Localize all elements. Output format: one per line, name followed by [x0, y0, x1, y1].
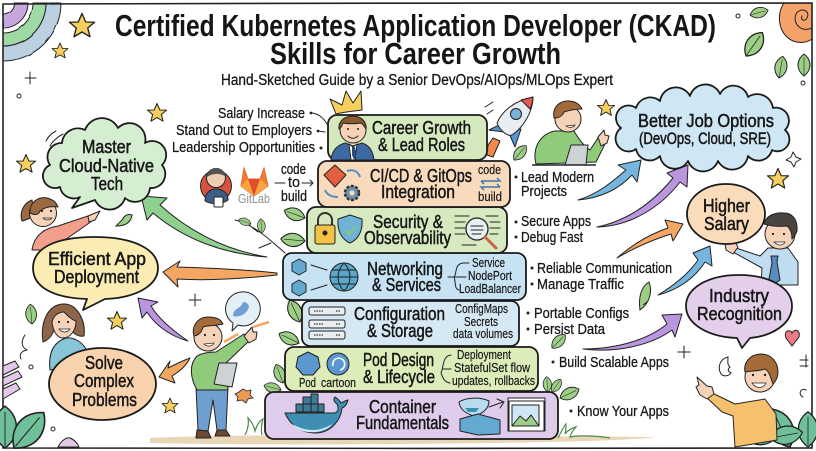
bubble: Master Cloud-Native Tech: Tech [91, 173, 123, 194]
arrow: to Better Job Options purple [597, 165, 688, 227]
layer: Pod Design & Lifecycle: Pod Design [363, 349, 434, 370]
bubble: Higher Salary: Salary [704, 213, 750, 234]
icon: speech bubble with cloud [226, 292, 260, 331]
callout: Secure Apps, Debug Fast: Debug Fast [521, 229, 584, 246]
callout: Reliable Communication, Manage Traffic: Manage Traffic [537, 276, 624, 293]
ground strip [150, 435, 655, 444]
icon: magnifier over logs [455, 216, 500, 248]
layer: Configuration & Storage: ConfigMaps [455, 302, 508, 316]
layer: Pod Design & Lifecycle: & Lifecycle [363, 366, 435, 387]
callout: Lead Modern Projects: Projects [521, 183, 567, 200]
callouts: career growth benefits: Leadership Opportunities [172, 139, 315, 156]
layer: Pod Design & Lifecycle: StatefulSet flow [454, 361, 531, 375]
icon: git diamond and cycle gear [324, 165, 360, 200]
bubble: Better Job Options: Better Job Options [638, 110, 774, 131]
callout: Reliable Communication, Manage Traffic [530, 260, 672, 293]
layer: CI/CD & GitOps Integration: Integration [381, 181, 455, 202]
bubble: Better Job Options [616, 84, 789, 171]
icon: padlock [315, 213, 335, 244]
decoration: top-left rainbow [3, 3, 61, 61]
callout: Portable Configs, Persist Data [526, 305, 629, 338]
arrow: to Industry Recognition [583, 314, 682, 350]
bubble: Industry Recognition: Industry [709, 285, 770, 306]
decoration: bottom-left foliage [0, 361, 79, 451]
icon: rocket [485, 97, 533, 157]
bubble: Efficient App Deployment: Efficient App [48, 248, 146, 269]
layer: Career Growth & Lead Roles [328, 91, 487, 160]
icon: double arrow [481, 178, 500, 190]
bubble: Industry Recognition [686, 275, 792, 348]
layer: Career Growth & Lead Roles: Career Growth [372, 117, 471, 138]
layer: Networking & Services: NodePort [468, 269, 512, 283]
layer: Container Fundamentals: Fundamentals [356, 412, 449, 433]
title: Skills for Career Growth [270, 36, 561, 71]
callout: Reliable Communication, Manage Traffic: Reliable Communication [537, 260, 672, 277]
flow: code to build [275, 161, 313, 205]
callout: Lead Modern Projects [514, 169, 594, 200]
icon: jenkins [200, 168, 232, 207]
layer: CI/CD & GitOps Integration [318, 161, 510, 207]
bubble: Better Job Options: (DevOps, Cloud, SRE) [639, 130, 771, 148]
icon: server stack [309, 307, 345, 339]
arrow: to Solve Complex Problems [159, 358, 190, 383]
callout: Secure Apps, Debug Fast: Secure Apps [521, 213, 591, 230]
layer: Security & Observability [307, 207, 507, 253]
callout: Know Your Apps: Know Your Apps [577, 403, 669, 420]
bubble: Higher Salary [687, 184, 765, 244]
flow: code to build: build [281, 188, 307, 205]
callout: Build Scalable Apps: Build Scalable Apps [559, 354, 669, 371]
layer: Networking & Services [283, 253, 526, 300]
person: crowned developer [330, 91, 374, 160]
layer: Configuration & Storage: Configuration [354, 303, 445, 324]
person: man pointing at Higher Salary [724, 213, 798, 285]
icon: network cubes [292, 259, 327, 296]
callouts: career growth benefits [172, 105, 327, 156]
callout: Portable Configs, Persist Data: Persist Data [534, 321, 606, 338]
flow: code to build: code [281, 161, 306, 178]
layer: Security & Observability: Security & [373, 211, 444, 232]
person: developer with laptop [532, 101, 609, 165]
callout: Lead Modern Projects: Lead Modern [521, 169, 594, 186]
callouts: career growth benefits: Salary Increase [218, 105, 305, 122]
icon: gitlab fox [241, 168, 268, 196]
bubble: Efficient App Deployment [33, 237, 158, 310]
arrow: to Master Cloud-Native Tech [141, 196, 267, 257]
callouts: career growth benefits: Stand Out to Employers [176, 122, 312, 139]
layer: Configuration & Storage [302, 301, 519, 346]
title [115, 8, 716, 71]
icon: rotating pod circle [327, 353, 349, 375]
layer: Pod Design & Lifecycle [285, 347, 538, 391]
layer: Pod Design & Lifecycle: Deployment [457, 348, 511, 362]
decoration: bottom-right foliage [743, 404, 816, 451]
person: woman pointing at cloud [21, 198, 100, 250]
arrow: to Efficient App Deployment [163, 261, 277, 287]
callout: Portable Configs, Persist Data: Portable Configs [534, 305, 629, 322]
layer: CI/CD & GitOps Integration: build [478, 190, 502, 204]
decoration: top-right spiral and leaves [736, 3, 812, 85]
layer: Container Fundamentals [265, 392, 558, 439]
flow: code to build: to [288, 174, 300, 191]
bubble: Solve Complex Problems: Problems [72, 389, 137, 410]
bubble: Efficient App Deployment: Deployment [54, 266, 139, 287]
bubble: Master Cloud-Native Tech [43, 118, 166, 210]
callout: Secure Apps, Debug Fast [514, 213, 591, 246]
person: expert with tablet [191, 317, 269, 438]
arrow: to Better Job Options blue [578, 160, 641, 200]
layer: Configuration & Storage: & Storage [367, 320, 433, 341]
person: boy pointing at Industry Recognition [696, 354, 778, 447]
icon: container and picture [459, 398, 545, 435]
layer: Container Fundamentals: Container [369, 396, 436, 417]
layer: Configuration & Storage: data volumes [453, 327, 513, 341]
layer: Pod Design & Lifecycle: cartoon [321, 376, 356, 390]
subtitle: Hand-Sketched Guide by a Senior DevOps/AIOps/MLOps Expert [221, 72, 614, 89]
label: GitLab: GitLab [238, 192, 270, 206]
arrow: to Higher Salary orange [617, 220, 683, 258]
bubble: Solve Complex Problems [49, 348, 156, 420]
layer: Networking & Services: LoadBalancer [459, 282, 521, 296]
bubble: Solve Complex Problems: Complex [74, 370, 135, 391]
bubble: Higher Salary: Higher [703, 195, 750, 216]
icon: pod hexagon [296, 352, 320, 375]
layer: Networking & Services: Service [472, 256, 505, 270]
decoration: foliage around the stack [235, 142, 610, 438]
layer: Pod Design & Lifecycle: updates, rollbacks [452, 374, 535, 388]
arrow: to Efficient App Deployment from expert [138, 298, 188, 341]
layer: CI/CD & GitOps Integration: CI/CD & GitOps [370, 165, 472, 186]
layer: Pod Design & Lifecycle: Pod [299, 376, 316, 390]
icon: shield [338, 215, 362, 243]
bubble: Solve Complex Problems: Solve [85, 352, 123, 373]
icon: globe [330, 263, 358, 291]
bubble: Master Cloud-Native Tech: Cloud-Native [59, 155, 154, 176]
layer: CI/CD & GitOps Integration: code [478, 163, 501, 177]
layer: Networking & Services: & Services [372, 274, 441, 295]
layer: Security & Observability: Observability [364, 227, 452, 248]
bubble: Industry Recognition: Recognition [697, 303, 782, 324]
arrow: to Higher Salary blue [658, 246, 712, 295]
icon: docker whale [285, 394, 348, 433]
layer: Networking & Services: Networking [367, 258, 443, 279]
layer: Configuration & Storage: Secrets [464, 315, 498, 329]
layer: Career Growth & Lead Roles: & Lead Roles [378, 134, 465, 155]
person: woman behind Solve Complex Problems [42, 304, 86, 370]
bubble: Master Cloud-Native Tech: Master [82, 136, 131, 157]
